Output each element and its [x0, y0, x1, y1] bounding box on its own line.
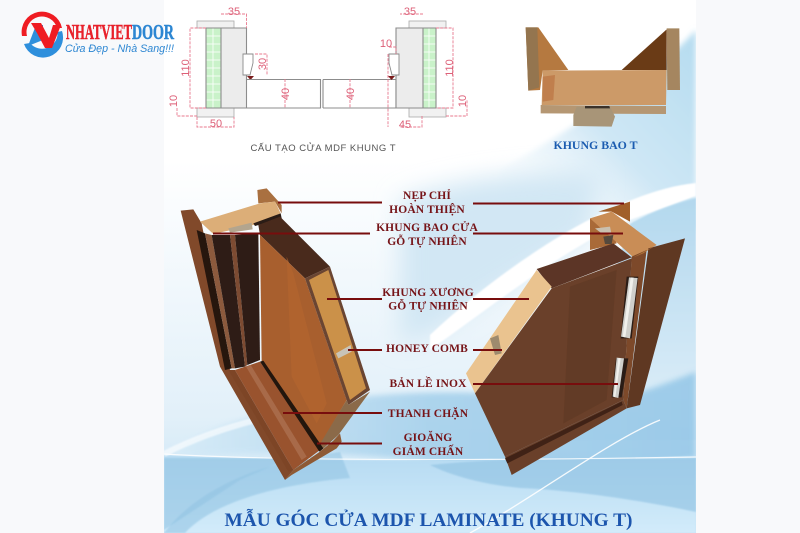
technical drawing: door section	[168, 6, 469, 131]
door leaf section	[247, 80, 396, 108]
left jamb section	[197, 21, 254, 117]
label: honey comb: HONEY COMB	[386, 343, 468, 355]
right jamb section	[388, 21, 446, 117]
label: khung bao cua: GỖ TỰ NHIÊN	[387, 233, 467, 248]
line: khung xuong left	[327, 298, 382, 300]
line: thanh chan	[283, 412, 382, 414]
line: gioang	[317, 442, 382, 444]
title: MẪU GÓC CỬA MDF LAMINATE (KHUNG T)	[224, 509, 632, 531]
label: thanh chan: THANH CHẶN	[388, 406, 469, 420]
line: khung bao left	[213, 232, 370, 234]
slogan: Cửa Đẹp - Nhà Sang!!!	[65, 43, 174, 55]
photo: right door corner	[466, 202, 685, 475]
brand name: NHATVIET	[66, 20, 132, 44]
dimension lines	[177, 14, 467, 127]
brand name door: DOOR	[132, 20, 175, 44]
dimension values: 30	[257, 58, 269, 70]
dimension values: 40	[280, 88, 292, 100]
line: khung xuong right	[473, 298, 529, 300]
dimension values: 50	[210, 118, 222, 130]
dimension values: 45	[399, 119, 411, 131]
label: gioang giam chan: GIOĂNG	[404, 430, 452, 444]
part labels	[376, 188, 478, 458]
panel: blue wave background	[164, 0, 696, 533]
photo: T frame	[526, 27, 680, 127]
line: honey comb right	[473, 349, 502, 351]
label: nep chi hoan thien: NẸP CHỈ	[403, 188, 451, 202]
label: ban le inox: BẢN LỀ INOX	[389, 375, 467, 390]
logo	[22, 12, 175, 58]
caption: door section: CẤU TẠO CỬA MDF KHUNG T	[250, 142, 396, 154]
line: nep chi left	[278, 202, 382, 204]
caption: T frame: KHUNG BAO T	[554, 138, 638, 152]
dimension values	[168, 6, 469, 131]
label: gioang giam chan: GIẢM CHẤN	[393, 443, 464, 458]
label: khung xuong: GỖ TỰ NHIÊN	[388, 298, 468, 312]
line: khung bao right	[473, 232, 623, 234]
line: ban le	[473, 383, 618, 385]
dimension values: 10	[457, 95, 469, 107]
dimension values: 110	[180, 59, 192, 77]
label: khung xuong: KHUNG XƯƠNG	[382, 286, 474, 299]
label: nep chi hoan thien: HOÀN THIỆN	[389, 202, 465, 216]
dimension values: 35	[228, 6, 240, 18]
dimension values: 10	[168, 95, 180, 107]
icon: logo circle	[22, 12, 63, 58]
leader lines	[213, 202, 624, 444]
label: khung bao cua: KHUNG BAO CỬA	[376, 220, 478, 234]
dimension values: 40	[345, 88, 357, 100]
photo: left door corner	[181, 188, 370, 480]
dimension values: 110	[444, 59, 456, 77]
dimension values: 10	[380, 38, 392, 50]
line: nep chi right	[473, 202, 624, 204]
dimension values: 35	[404, 6, 416, 18]
line: honey comb left	[348, 349, 382, 351]
